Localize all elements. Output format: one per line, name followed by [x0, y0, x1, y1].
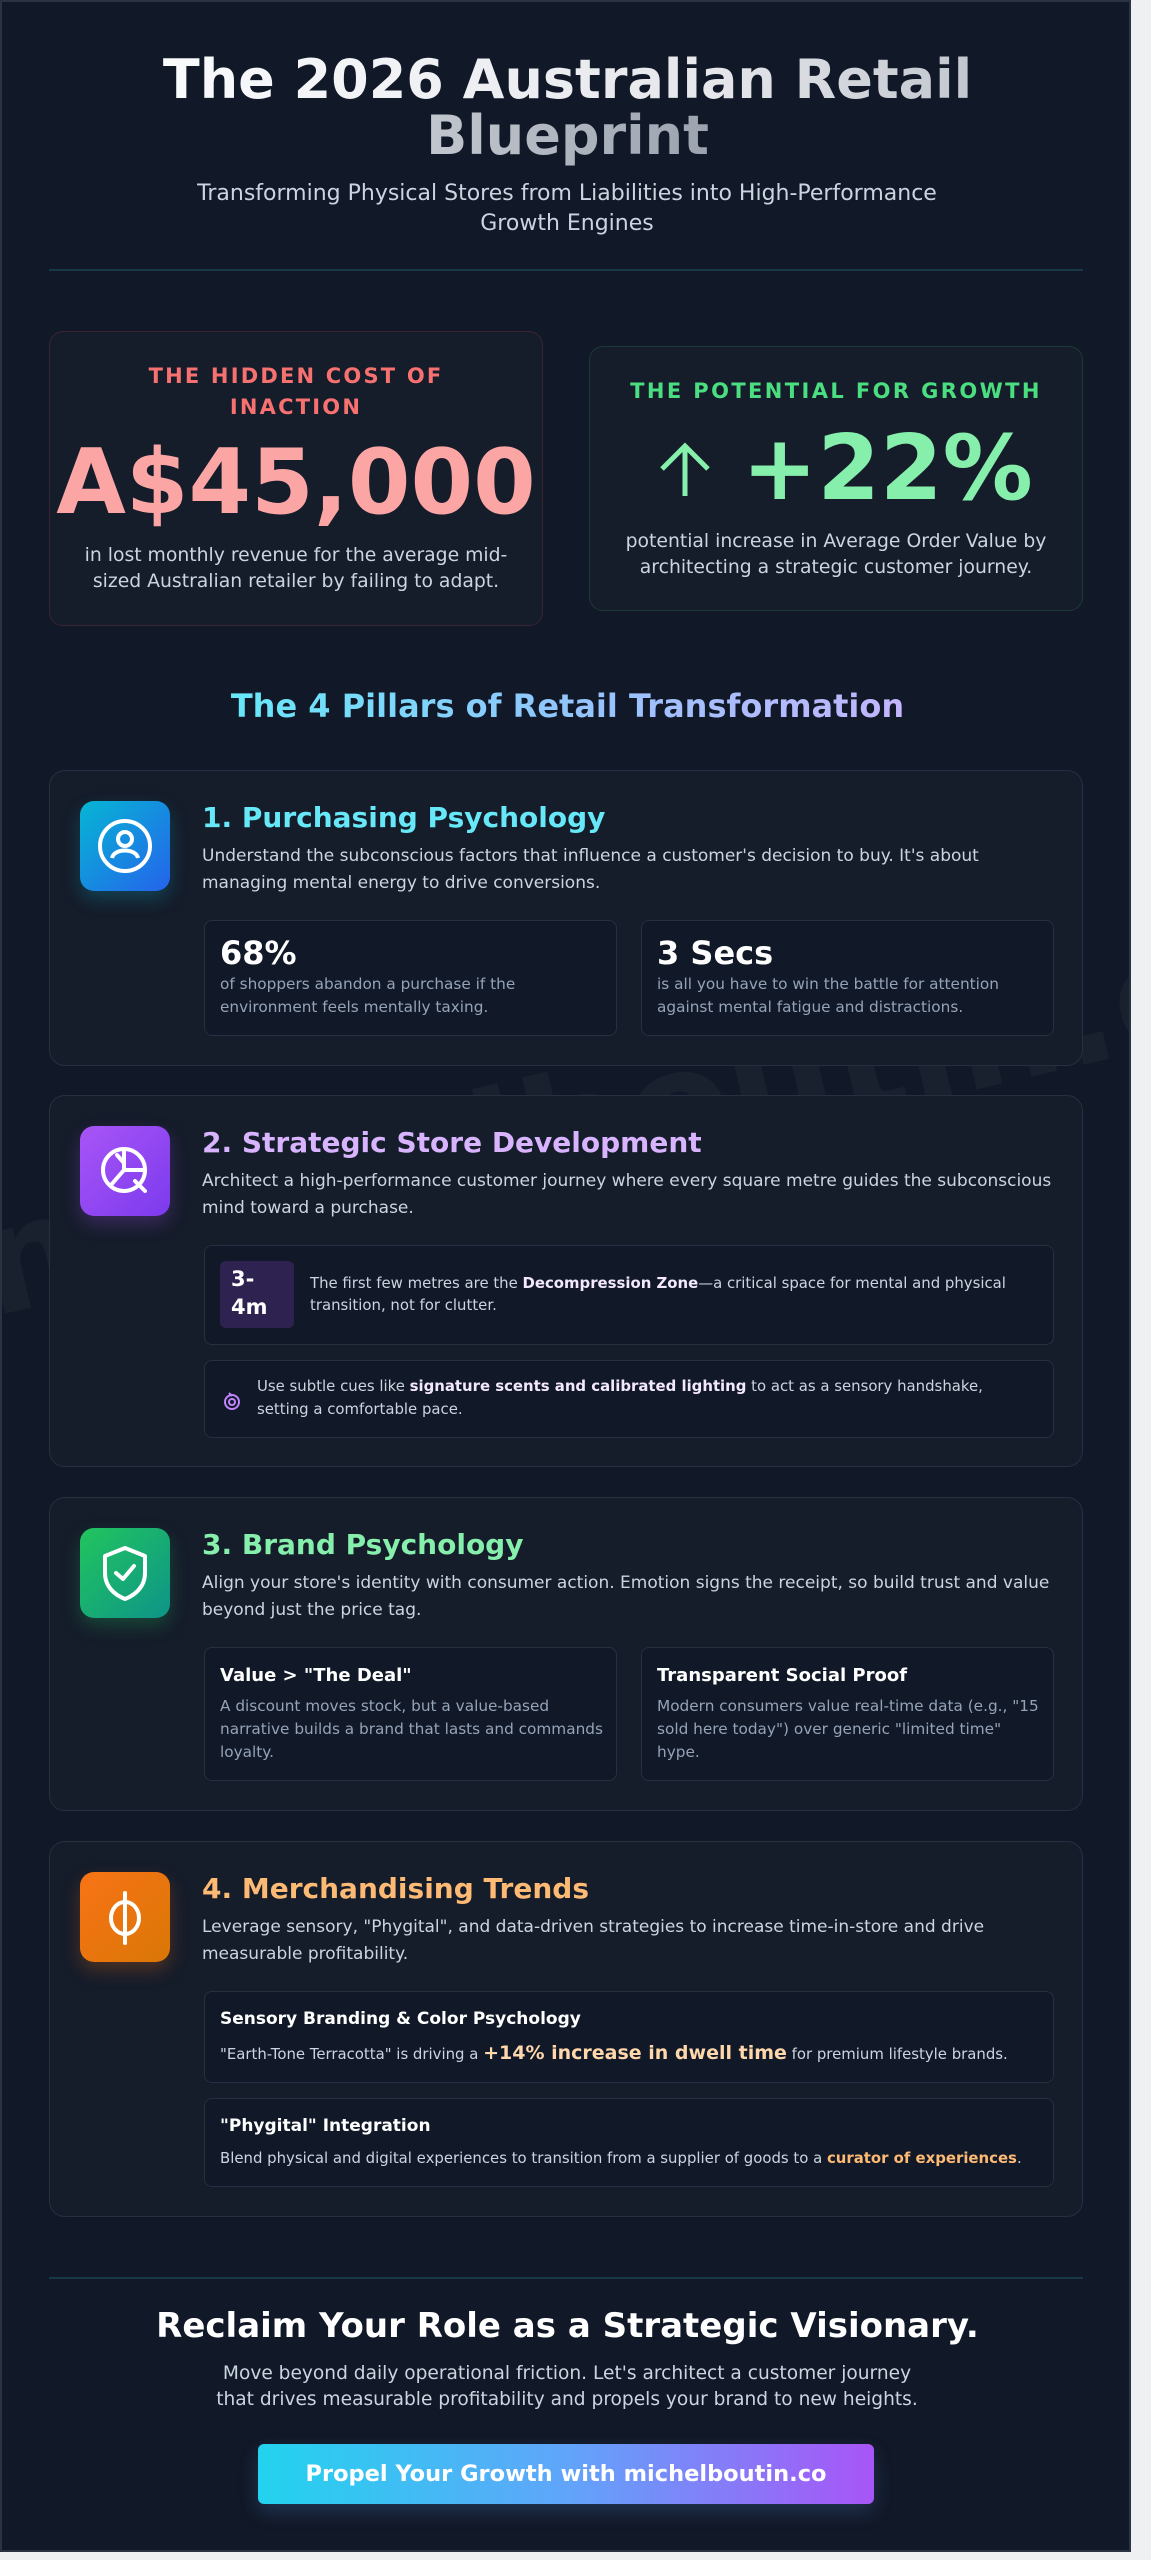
big number: A$45,000: [56, 430, 536, 535]
callout: decompression zone: The first few metres are the Decompression Zone—a critical space for mental and physical transition, not for clutter.: [310, 1274, 1006, 1314]
description: Architect a high-performance customer journey where every square metre guides the subconscious mind toward a purchase.: [202, 1171, 1051, 1218]
label: hidden cost: THE HIDDEN COST OF: [149, 364, 443, 388]
tip: phygital: "Phygital" Integration: [220, 2116, 431, 2136]
heading: 3. Brand Psychology: [202, 1528, 523, 1561]
stat: 68%: [204, 920, 617, 1036]
description: Leverage sensory, "Phygital", and data-driven strategies to increase time-in-store and drive measurable profitability.: [202, 1917, 984, 1964]
description: Understand the subconscious factors that influence a customer's decision to buy. It's about managing mental energy to drive conversions.: [202, 846, 979, 893]
description: Align your store's identity with consumer action. Emotion signs the receipt, so build trust and value beyond just the price tag.: [202, 1573, 1049, 1620]
callout: sensory cues: Use subtle cues like signature scents and calibrated lighting to act as a sensory handshake, setting a comfortable pace.: [257, 1377, 983, 1418]
title: The 2026 Australian Retail: [163, 48, 972, 111]
callout: sensory cues: [204, 1360, 1054, 1438]
tip: value: [204, 1647, 617, 1781]
tip: value: Value > "The Deal": [220, 1665, 412, 1686]
tip: phygital: [204, 2098, 1054, 2187]
badge: 4m: [231, 1295, 268, 1319]
button: Propel Your Growth with michelboutin.co: [305, 2461, 826, 2487]
tip: sensory branding: "Earth-Tone Terracotta" is driving a +14% increase in dwell time for premium lifestyle brands.: [220, 2042, 1008, 2064]
heading: 2. Strategic Store Development: [202, 1126, 702, 1159]
description: in lost monthly revenue for the average mid-sized Australian retailer by failing to adapt.: [85, 545, 507, 592]
badge: [220, 1261, 294, 1328]
panel: growth: [589, 346, 1083, 611]
title: [163, 48, 972, 167]
stat: 3 secs: 3 Secs: [657, 934, 773, 972]
stat: 3 secs: [641, 920, 1054, 1036]
stat: 3 secs: is all you have to win the battle for attention against mental fatigue and distractions.: [657, 975, 999, 1016]
icon: compass chart: [80, 1126, 170, 1216]
tip: value: A discount moves stock, but a value-based narrative builds a brand that lasts and commands loyalty.: [220, 1697, 603, 1761]
callout: decompression zone: [204, 1245, 1054, 1345]
heading: 1. Purchasing Psychology: [202, 801, 605, 834]
button: [258, 2444, 874, 2504]
panel: hidden cost: [49, 331, 543, 626]
stat: 68%: of shoppers abandon a purchase if the environment feels mentally taxing.: [220, 975, 515, 1016]
tip: social proof: [641, 1647, 1054, 1781]
tip: phygital: Blend physical and digital experiences to transition from a supplier of goods to a curator of experiences.: [220, 2149, 1022, 2167]
tip: sensory branding: Sensory Branding & Color Psychology: [220, 2009, 581, 2029]
icon: swirl: [224, 1392, 240, 1410]
footer text: Move beyond daily operational friction. Let's architect a customer journey that drives measurable profitability and propels your brand to new heights.: [216, 2363, 918, 2410]
panel: pillar 4: [49, 1841, 1083, 2217]
icon: user circle: [80, 801, 170, 891]
icon: up arrow: [660, 442, 710, 496]
badge: 3-: [231, 1267, 254, 1291]
section heading: The 4 Pillars of Retail Transformation: [231, 687, 904, 725]
label: hidden cost: INACTION: [230, 395, 362, 419]
stat: 68%: 68%: [220, 934, 297, 972]
tip: sensory branding: [204, 1991, 1054, 2083]
tip: social proof: Modern consumers value real-time data (e.g., "15 sold here today") over generic "limited time" hype.: [657, 1697, 1039, 1761]
footer heading: Reclaim Your Role as a Strategic Visionary.: [156, 2306, 979, 2346]
label: hidden cost: [148, 364, 443, 419]
subtitle: Transforming Physical Stores from Liabilities into High-Performance Growth Engines: [197, 181, 937, 236]
title: Blueprint: [426, 104, 709, 167]
label: growth: THE POTENTIAL FOR GROWTH: [630, 379, 1042, 403]
icon: shield: [80, 1528, 170, 1618]
description: potential increase in Average Order Value by architecting a strategic customer journey.: [626, 531, 1046, 578]
tip: social proof: Transparent Social Proof: [657, 1665, 907, 1686]
panel: pillar 3: [49, 1497, 1083, 1811]
heading: 4. Merchandising Trends: [202, 1872, 589, 1905]
panel: pillar 1: [49, 770, 1083, 1066]
icon: phi: [80, 1872, 170, 1962]
panel: pillar 2: [49, 1095, 1083, 1467]
big number: +22%: [742, 416, 1033, 521]
